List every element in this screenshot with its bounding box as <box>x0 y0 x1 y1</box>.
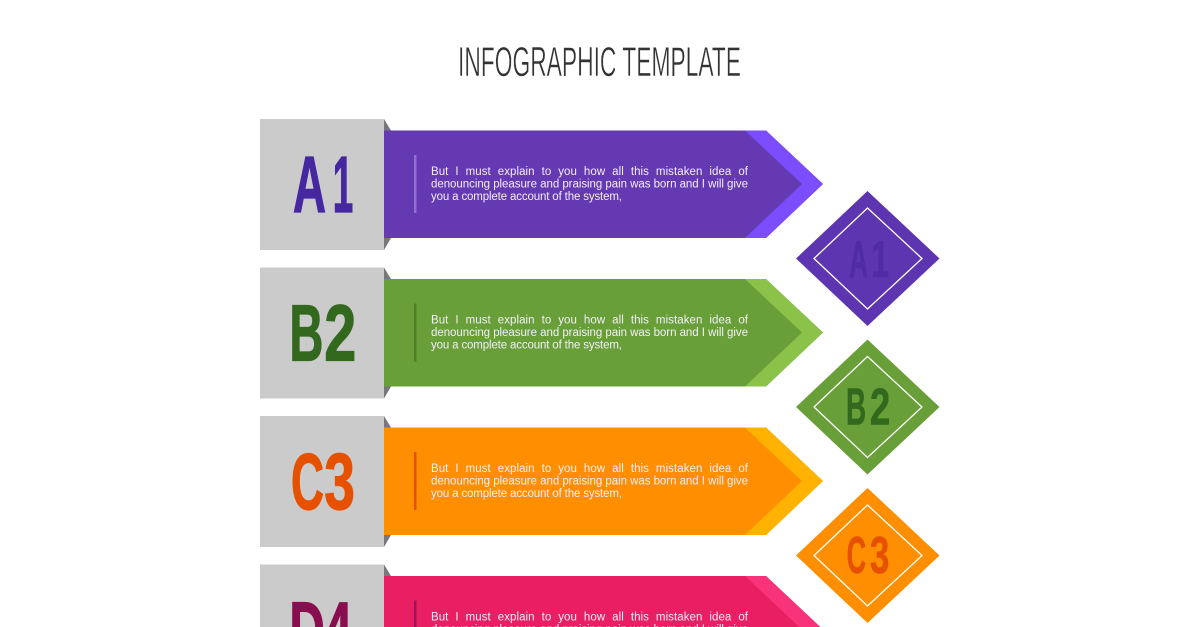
diamond badge A1 <box>796 191 940 326</box>
body text: denouncing pleasure and praising pain was born and I will give <box>431 476 748 488</box>
body text <box>431 314 749 352</box>
diamond badge C3 <box>796 488 940 623</box>
label box C3 <box>260 416 384 547</box>
fold top <box>384 119 391 130</box>
arrow banner <box>384 576 820 627</box>
big label: 2 <box>324 288 356 378</box>
label box D4 <box>260 564 384 627</box>
diamond outline <box>814 208 922 309</box>
big label: B <box>289 288 323 378</box>
arrow banner <box>384 279 823 386</box>
fold top <box>384 416 391 428</box>
arrow tip highlight <box>745 130 823 238</box>
body text: But I must explain to you how all this mistaken idea of <box>431 463 749 475</box>
body text: But I must explain to you how all this mistaken idea of <box>431 314 749 326</box>
accent line <box>414 155 416 213</box>
panel: row D4 <box>260 564 820 627</box>
body text: denouncing pleasure and praising pain was born and I will give <box>431 178 748 190</box>
diamond label: A <box>849 231 868 289</box>
diamond shape <box>796 488 940 623</box>
diamond badge B2 <box>796 340 940 474</box>
diamond label: 2 <box>870 378 890 436</box>
diamond shape <box>796 191 940 326</box>
panel: row A1 <box>260 119 823 250</box>
panel: row C3 <box>260 416 823 547</box>
arrow tip highlight <box>745 279 823 386</box>
diamond label: C <box>847 527 866 585</box>
accent line <box>414 452 416 510</box>
accent line <box>414 304 416 362</box>
diamond outline <box>814 505 922 606</box>
accent line <box>414 600 416 627</box>
big label: A <box>293 140 326 229</box>
big label: 3 <box>324 437 355 526</box>
body text: you a complete account of the system, <box>431 191 622 203</box>
label box A1 <box>260 119 384 250</box>
arrow banner <box>384 130 823 238</box>
diamond shape <box>796 340 940 474</box>
diamond label: B <box>846 378 866 436</box>
diamond outline <box>814 356 922 458</box>
big label: C <box>291 437 324 526</box>
arrow banner <box>384 428 823 535</box>
body text: you a complete account of the system, <box>431 488 622 500</box>
body text: you a complete account of the system, <box>431 340 622 352</box>
fold bottom <box>384 535 391 547</box>
panel: row A1: 1 <box>333 140 353 229</box>
arrow tip highlight <box>745 576 820 627</box>
fold bottom <box>384 386 391 398</box>
fold top <box>384 268 391 279</box>
body text: But I must explain to you how all this mistaken idea of <box>431 166 749 178</box>
body text: But I must explain to you how all this mistaken idea of <box>431 612 749 624</box>
body text <box>431 463 749 500</box>
arrow tip highlight <box>745 428 823 535</box>
diamond label: 1 <box>871 231 889 289</box>
panel: row B2 <box>260 268 823 398</box>
diamond label: 3 <box>870 527 889 585</box>
fold top <box>384 564 391 576</box>
body text <box>431 166 749 203</box>
fold bottom <box>384 238 391 250</box>
body text: denouncing pleasure and praising pain was born and I will give <box>431 327 748 339</box>
label box B2 <box>260 268 384 398</box>
title: INFOGRAPHIC TEMPLATE <box>458 38 741 85</box>
big label <box>292 602 348 627</box>
